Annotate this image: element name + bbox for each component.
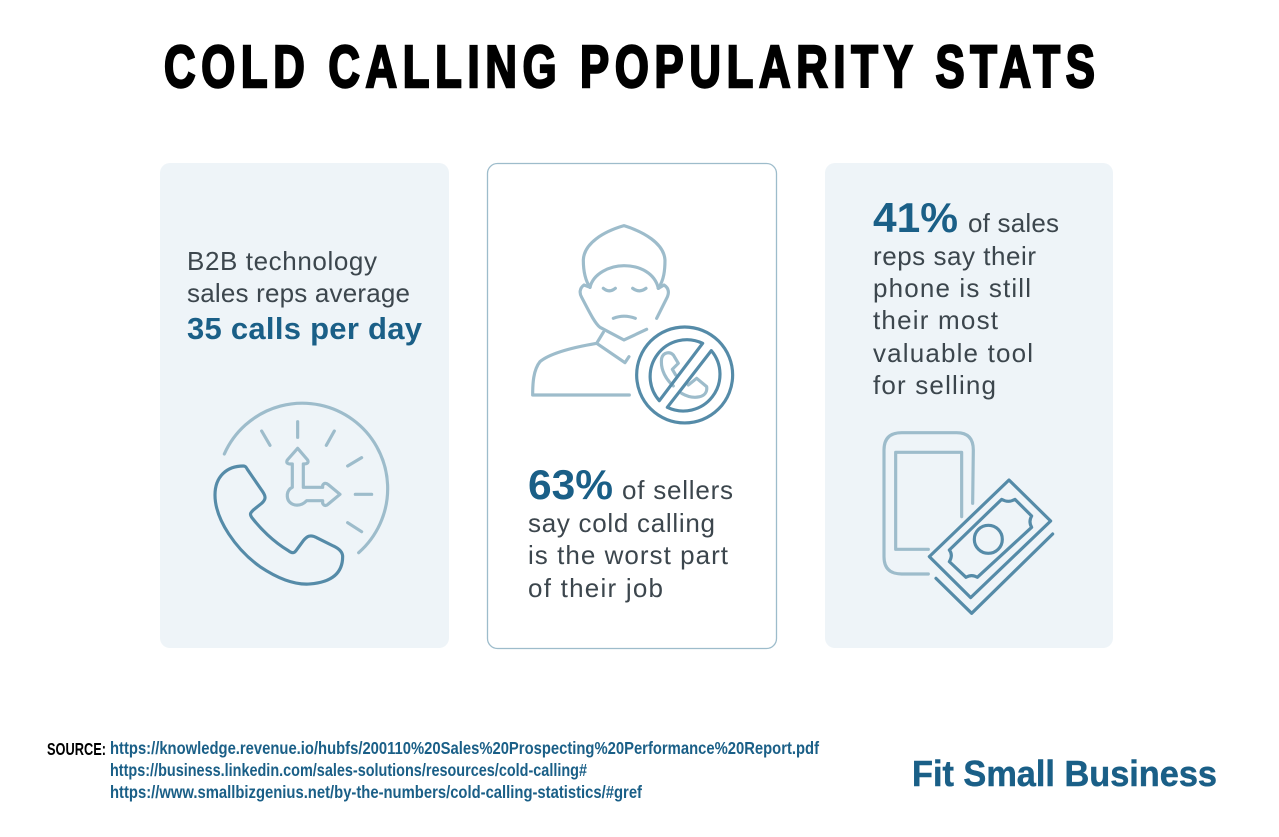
source list bbox=[47, 738, 819, 802]
text: 41% of sales reps bbox=[873, 194, 1059, 400]
text: 63% of sellers bbox=[528, 461, 733, 603]
text: 63% of sellers: is the worst part bbox=[528, 540, 729, 570]
text: 41% of sales reps: their most bbox=[873, 305, 999, 335]
source list: https://www.smallbizgenius.net/by-the-numbers/cold-calling-statistics/#gref bbox=[110, 782, 642, 802]
icon: phone and clock bbox=[215, 403, 388, 584]
text: 63% of sellers: say cold calling bbox=[528, 508, 715, 538]
panel: 41% of sales reps bbox=[825, 163, 1113, 648]
text: calls per day: sales reps average bbox=[187, 278, 410, 308]
text: 63% of sellers: of their job bbox=[528, 573, 663, 603]
logo: Fit Small Business: Fit Small Business bbox=[912, 753, 1217, 794]
text: calls per day bbox=[187, 246, 423, 346]
panel: 63% of sellers bbox=[488, 164, 776, 648]
source list: https://knowledge.revenue.io/hubfs/200110%20Sales%20Prospecting%20Performance%20Report.pdf bbox=[110, 738, 819, 758]
icon: phone and banknote bbox=[884, 433, 1053, 613]
text: calls per day: B2B technology bbox=[187, 246, 377, 276]
text: 63% of sellers: 63% bbox=[528, 461, 613, 508]
text: calls per day: 35 calls per day bbox=[187, 311, 423, 346]
icon: sad person with no-phone sign bbox=[533, 226, 733, 423]
text: 41% of sales reps: of sales bbox=[968, 208, 1059, 238]
text: 41% of sales reps: phone is still bbox=[873, 273, 1031, 303]
source list: https://business.linkedin.com/sales-solutions/resources/cold-calling# bbox=[110, 760, 587, 780]
text: 63% of sellers: of sellers bbox=[622, 475, 733, 505]
title: COLD CALLING POPULARITY STATS bbox=[164, 34, 1095, 100]
source list: SOURCE: bbox=[47, 739, 106, 759]
text: 41% of sales reps: valuable tool bbox=[873, 338, 1033, 368]
text: 41% of sales reps: reps say their bbox=[873, 241, 1036, 271]
text: 41% of sales reps: for selling bbox=[873, 370, 996, 400]
text: 41% of sales reps: 41% bbox=[873, 194, 958, 241]
panel: 35 calls per day bbox=[160, 163, 449, 648]
